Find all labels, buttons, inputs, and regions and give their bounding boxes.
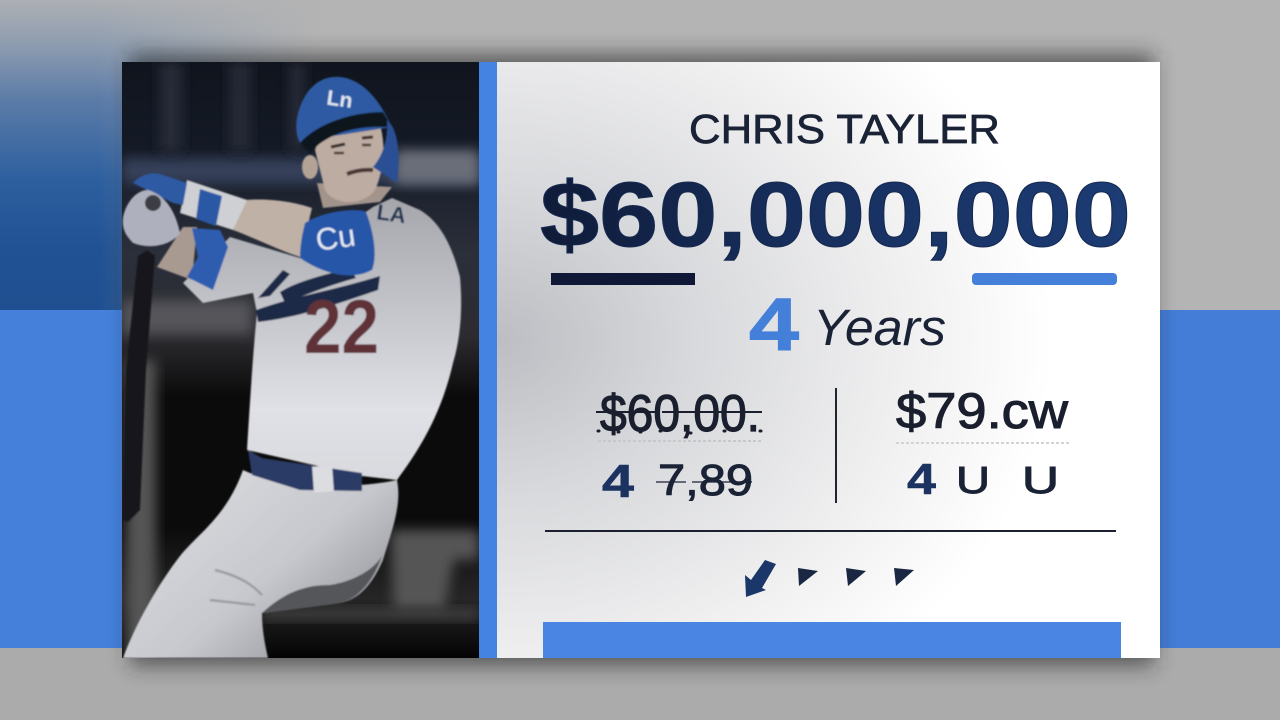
stat: right column xyxy=(896,383,1070,504)
underline: navy xyxy=(551,273,695,285)
icon: arrow xyxy=(745,560,776,597)
photo backdrop xyxy=(122,62,479,660)
contract length: 4 xyxy=(749,283,799,366)
blue stripe xyxy=(479,62,497,658)
icon: triangle three xyxy=(894,568,914,586)
helmet: Ln xyxy=(325,87,354,113)
stat: left column xyxy=(596,385,762,507)
panel background xyxy=(497,62,1160,658)
stat: left column: 7,89 xyxy=(658,456,753,505)
neck and face xyxy=(302,125,392,208)
glove and wrist xyxy=(123,173,247,246)
stat: left column: 4 xyxy=(602,455,635,507)
stat: right column: U xyxy=(956,460,990,502)
bat xyxy=(122,250,155,522)
horizontal divider xyxy=(545,530,1116,532)
icon: triangle one xyxy=(798,568,818,586)
card shadow xyxy=(130,54,1154,666)
belt xyxy=(248,450,362,493)
sleeve band: Cu xyxy=(313,218,358,258)
player name: CHRIS TAYLER xyxy=(689,106,1000,152)
stat: right column: U xyxy=(1022,460,1059,502)
stat: right column: 4 xyxy=(907,455,937,504)
shoulder logo: LA xyxy=(375,199,408,228)
panel: contract details xyxy=(497,62,1160,658)
stat: left column: $60,00. xyxy=(600,385,760,443)
jersey number: 22 xyxy=(304,285,379,370)
player figure xyxy=(122,77,461,658)
contract length: Years xyxy=(813,299,946,356)
sleeve band xyxy=(300,210,375,275)
helmet xyxy=(296,77,399,183)
jersey xyxy=(183,198,461,480)
footer bar xyxy=(543,622,1121,658)
upper arm xyxy=(233,199,312,257)
stat: right column: $79.cw xyxy=(896,383,1069,439)
pants wrinkles xyxy=(210,570,262,605)
lower arm sleeve xyxy=(187,228,228,290)
contract length xyxy=(749,283,946,366)
icon: triangle two xyxy=(846,568,866,586)
pants shadow xyxy=(262,556,382,613)
vertical divider xyxy=(835,388,837,503)
contract value: $60,000,000 xyxy=(540,164,1131,266)
jersey script wordmark xyxy=(256,268,380,322)
panel: player photo xyxy=(122,62,479,660)
pants xyxy=(123,470,398,658)
lower arm xyxy=(157,227,197,280)
underline: blue xyxy=(972,273,1117,285)
